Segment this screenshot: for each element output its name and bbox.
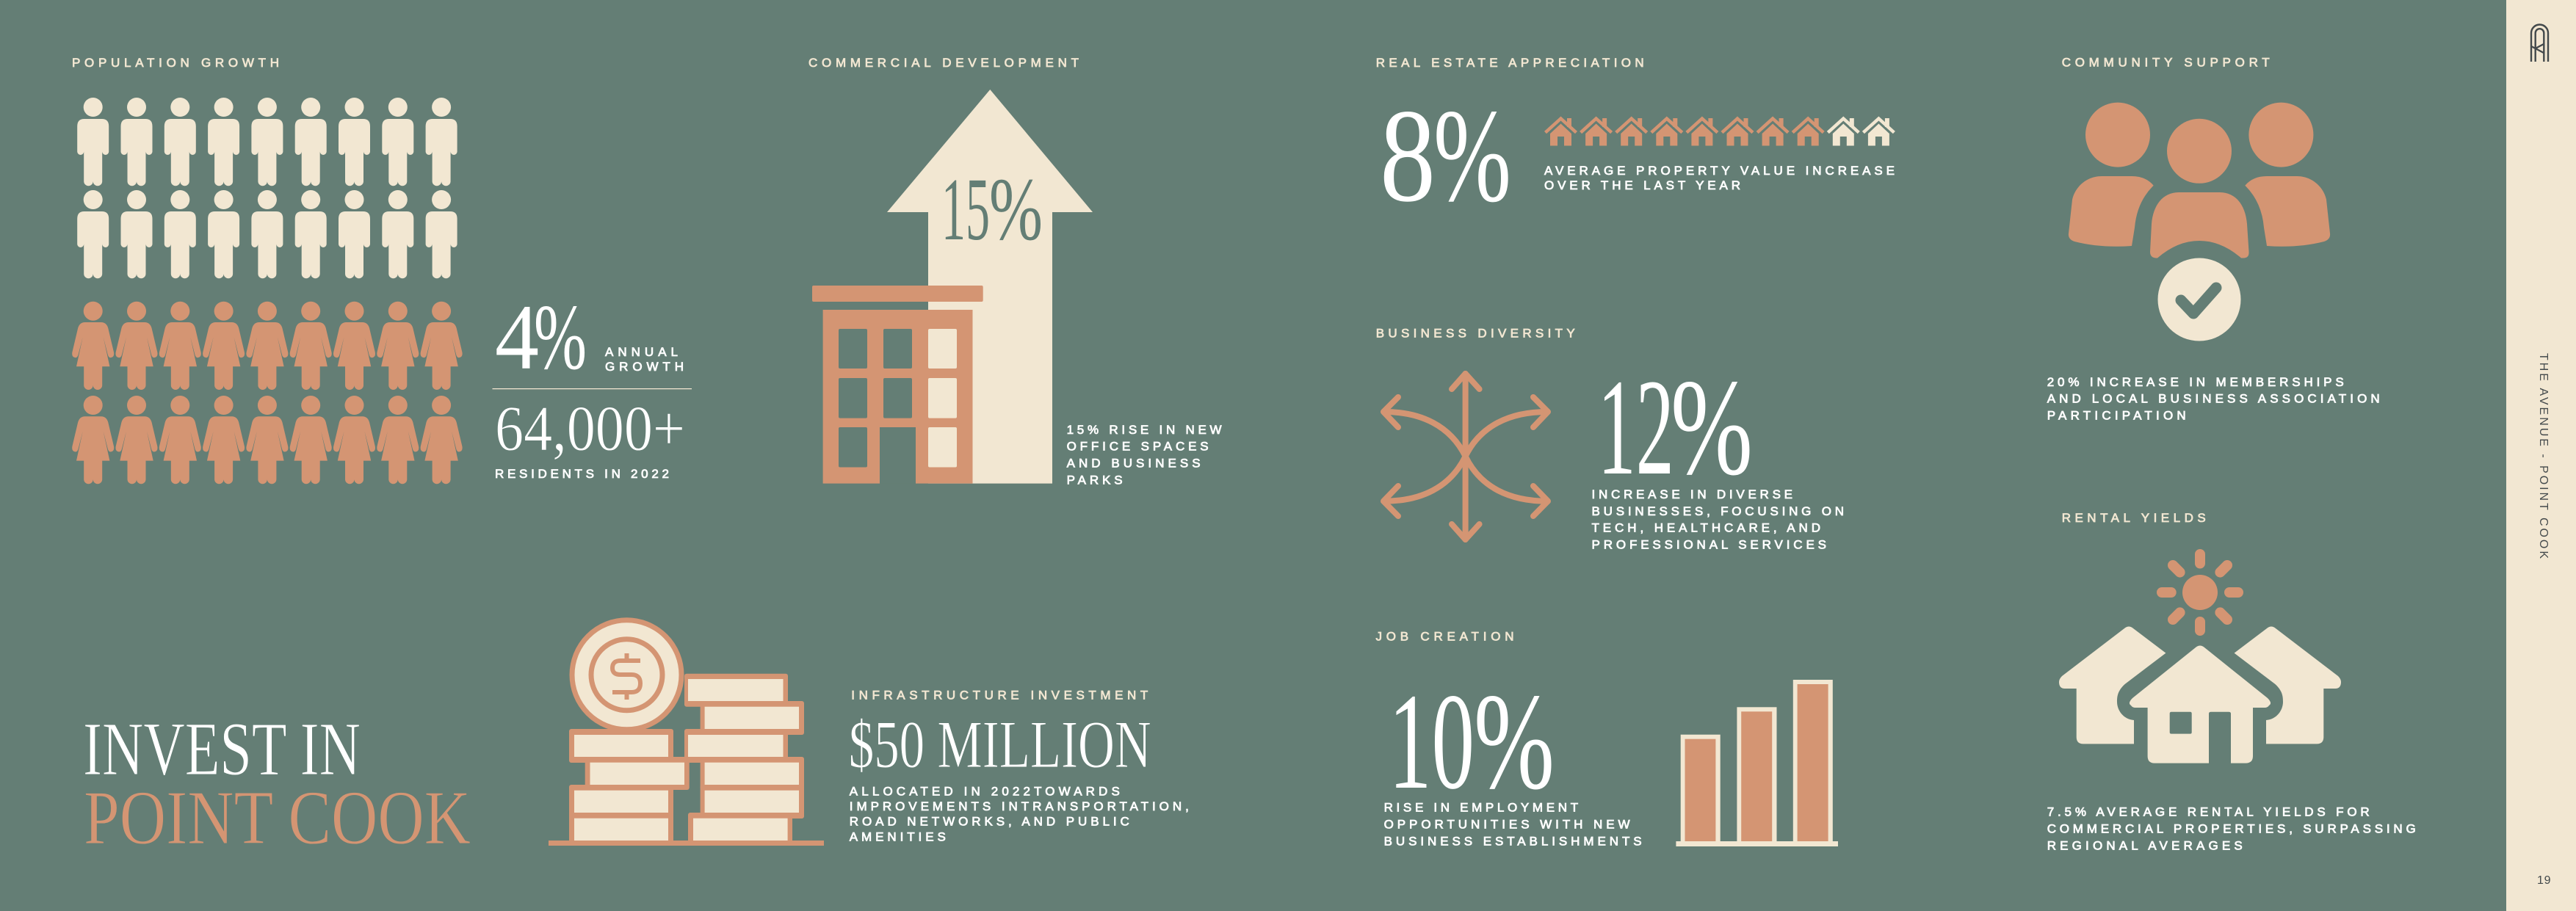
stat: 50 million: $50 MILLION (849, 707, 1151, 782)
description: 7.5% AVERAGE RENTAL YIELDS FOR (2047, 805, 2370, 819)
heading: COMMERCIAL DEVELOPMENT (808, 56, 1079, 70)
stat: 15 percent: 15 (941, 160, 990, 259)
description: 15% RISE IN NEW (1067, 423, 1222, 437)
description: PARKS (1067, 473, 1123, 487)
title: POINT COOK (84, 774, 471, 860)
heading: RENTAL YIELDS (2062, 511, 2206, 525)
panel: commercial development (808, 56, 1222, 487)
heading: POPULATION GROWTH (72, 56, 279, 70)
description (1592, 487, 1844, 551)
description: OPPORTUNITIES WITH NEW (1384, 818, 1630, 832)
description: RISE IN EMPLOYMENT (1384, 801, 1578, 815)
label: annual growth: ANNUAL (605, 345, 678, 359)
stat: 8 percent: 8 (1380, 82, 1436, 230)
icon: sun (2162, 554, 2238, 631)
description (2047, 805, 2416, 853)
panel: infrastructure investment (849, 689, 1189, 843)
icon grid: women (72, 302, 463, 484)
page number: 19 (2537, 874, 2551, 887)
panel: sidebar (2506, 0, 2576, 911)
panel: community support (2047, 56, 2380, 423)
label: residents in 2022: RESIDENTS IN 2022 (495, 467, 669, 481)
stat: residents: 64,000+ (495, 393, 685, 465)
label: annual growth: GROWTH (605, 360, 684, 374)
description: REGIONAL AVERAGES (2047, 839, 2243, 853)
description (2047, 375, 2380, 423)
icon row: houses (1545, 118, 1894, 145)
description: ALLOCATED IN 2022TOWARDS (850, 785, 1120, 799)
title (83, 707, 471, 860)
description (850, 785, 1189, 843)
description: BUSINESSES, FOCUSING ON (1592, 504, 1844, 518)
description: AVERAGE PROPERTY VALUE INCREASE (1544, 164, 1895, 178)
panel: job creation (1376, 629, 1838, 849)
description: ROAD NETWORKS, AND PUBLIC (850, 815, 1129, 829)
stat: 4 percent: % (534, 286, 587, 389)
description: PARTICIPATION (2047, 409, 2186, 423)
stat: 10 percent: % (1474, 664, 1555, 818)
title: INVEST IN (83, 707, 361, 791)
icon: diverging arrows (1383, 374, 1548, 540)
description (1544, 164, 1895, 192)
stat: 15 percent: % (989, 160, 1043, 259)
description: OFFICE SPACES (1067, 440, 1209, 454)
panel: business diversity (1376, 327, 1844, 551)
panel: real estate appreciation (1376, 56, 1895, 230)
description (1384, 801, 1642, 849)
heading: BUSINESS DIVERSITY (1376, 327, 1575, 341)
stat: 8 percent: % (1433, 82, 1511, 230)
icon: building (812, 286, 983, 484)
icon: houses (2059, 627, 2341, 763)
sidebar title: THE AVENUE - POINT COOK (2537, 353, 2550, 559)
stat: 12 percent: 12 (1598, 350, 1674, 504)
stat: 4 percent: 4 (495, 286, 539, 389)
icon: growth arrow (887, 90, 1093, 484)
description: BUSINESS ESTABLISHMENTS (1384, 835, 1642, 849)
description: INCREASE IN DIVERSE (1592, 487, 1792, 501)
description: OVER THE LAST YEAR (1544, 178, 1740, 192)
heading: COMMUNITY SUPPORT (2062, 56, 2270, 70)
heading: JOB CREATION (1376, 629, 1514, 643)
icon grid: men (77, 98, 457, 278)
panel: population growth (72, 56, 692, 484)
icon: check badge (2157, 258, 2241, 341)
panel: rental yields (2047, 511, 2416, 853)
stat: 12 percent: % (1671, 350, 1753, 504)
description: PROFESSIONAL SERVICES (1592, 537, 1826, 551)
stat: 4 percent (495, 286, 587, 389)
heading: REAL ESTATE APPRECIATION (1376, 56, 1644, 70)
description: COMMERCIAL PROPERTIES, SURPASSING (2047, 822, 2416, 836)
description: AND LOCAL BUSINESS ASSOCIATION (2047, 392, 2380, 406)
stat: 8 percent (1380, 82, 1511, 230)
description (1067, 423, 1222, 487)
description: TECH, HEALTHCARE, AND (1592, 521, 1820, 534)
label: annual growth (605, 345, 684, 374)
description: 20% INCREASE IN MEMBERSHIPS (2047, 375, 2344, 389)
icon: coin stacks (549, 620, 824, 846)
description: IMPROVEMENTS INTRANSPORTATION, (850, 799, 1189, 813)
bar chart (1676, 680, 1838, 846)
heading: INFRASTRUCTURE INVESTMENT (851, 689, 1148, 703)
description: AND BUSINESS (1067, 457, 1201, 470)
stat: 10 percent: 10 (1389, 664, 1475, 818)
icon: community group (2069, 103, 2330, 258)
icon: logo (2531, 25, 2548, 62)
description: AMENITIES (850, 830, 946, 843)
